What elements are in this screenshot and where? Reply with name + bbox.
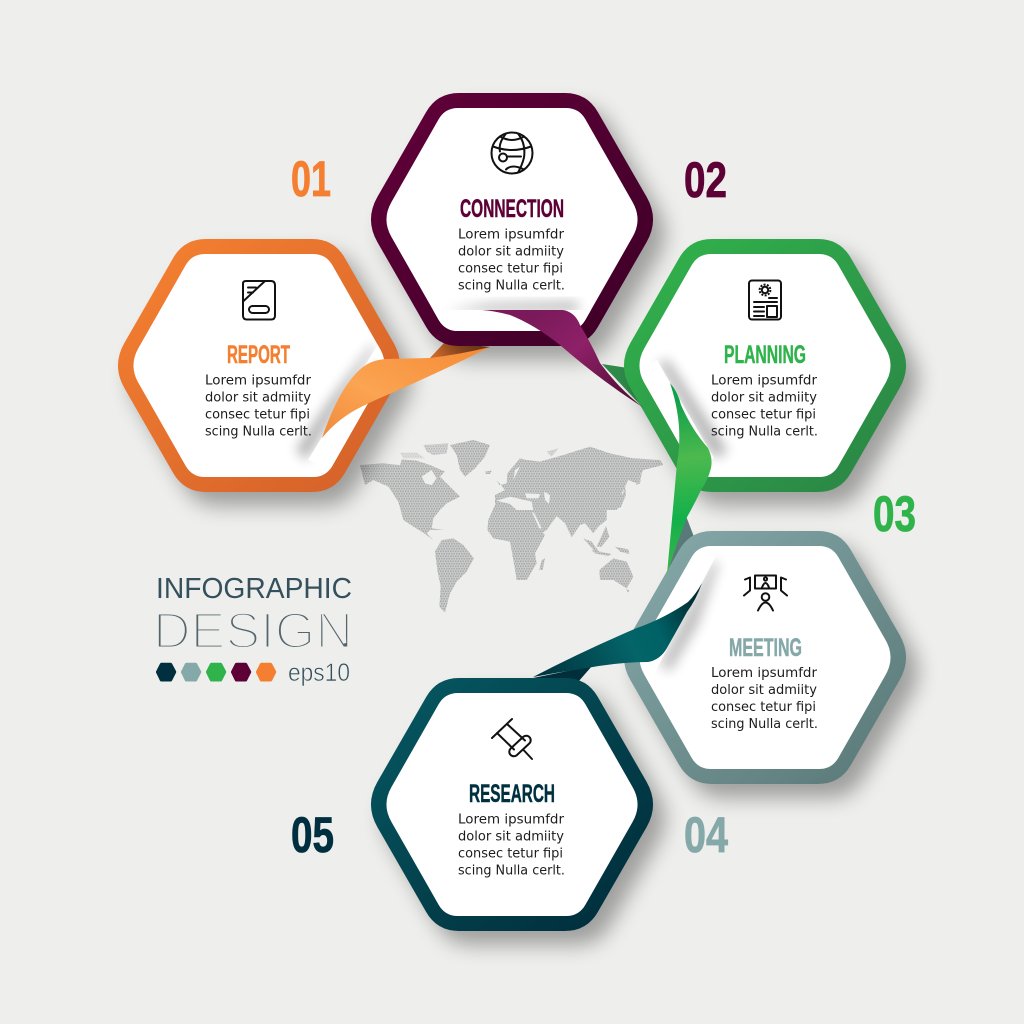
text block: research: dolor sit admiity [458, 830, 564, 844]
panel: planning hexagon [624, 239, 918, 506]
ribbon back: green [602, 364, 645, 410]
heading: meeting: MEETING [729, 634, 802, 662]
text block: planning [711, 374, 818, 440]
icon: meeting [744, 576, 787, 610]
text block: research: consec tetur fipi [458, 846, 563, 862]
text block: connection [458, 228, 565, 294]
icon: planning document [749, 280, 781, 320]
panel: connection hexagon [371, 93, 665, 360]
text block: connection: consec tetur fipi [458, 262, 563, 276]
number 05: 05 [291, 807, 334, 863]
number 04: 04 [684, 807, 728, 863]
ribbon: green [667, 383, 712, 574]
text block: connection: Lorem ipsumfdr [458, 228, 565, 242]
title line: design: DESIGN [153, 602, 353, 659]
number 03: 03 [873, 486, 916, 542]
text block: report: Lorem ipsumfdr [205, 374, 312, 388]
ribbon: orange [322, 347, 490, 438]
text block: report: consec tetur fipi [205, 408, 310, 422]
ribbon back: slate [666, 516, 696, 575]
text block: meeting: Lorem ipsumfdr [711, 666, 818, 681]
panel: research hexagon [371, 678, 665, 945]
text block: connection: dolor sit admiity [458, 244, 564, 260]
text block: connection: scing Nulla cerlt. [458, 278, 565, 294]
text block: report [205, 374, 312, 440]
text block: planning: dolor sit admiity [711, 390, 817, 406]
text block: research: scing Nulla cerlt. [458, 864, 565, 878]
text block: meeting: consec tetur fipi [711, 700, 816, 715]
text block: planning: consec tetur fipi [711, 408, 816, 422]
heading: research: RESEARCH [469, 780, 555, 808]
title: infographic design [153, 573, 353, 687]
text block: research [458, 812, 565, 878]
ribbon: purple [482, 310, 644, 408]
number 02: 02 [684, 152, 727, 208]
ribbon back: orange [428, 342, 490, 362]
heading: report: REPORT [227, 341, 290, 369]
heading: connection: CONNECTION [460, 195, 564, 223]
text block: planning: scing Nulla cerlt. [711, 424, 818, 440]
text block: meeting [711, 666, 818, 732]
title line: infographic: INFOGRAPHIC [156, 573, 352, 605]
text block: meeting: dolor sit admiity [711, 683, 817, 698]
text block: meeting: scing Nulla cerlt. [711, 717, 818, 732]
icon: report document [243, 281, 275, 320]
text block: report: scing Nulla cerlt. [205, 424, 312, 440]
icon: push pin [492, 719, 533, 759]
heading: planning: PLANNING [724, 341, 806, 369]
ribbon back: teal [533, 666, 592, 682]
colour swatches [158, 664, 274, 680]
number 01: 01 [291, 151, 331, 207]
label: eps10: eps10 [288, 659, 350, 687]
ribbon: teal [533, 583, 702, 677]
icon: globe [492, 132, 532, 174]
text block: planning: Lorem ipsumfdr [711, 374, 818, 388]
text block: research: Lorem ipsumfdr [458, 812, 565, 828]
text block: report: dolor sit admiity [205, 390, 311, 406]
panel: report hexagon [118, 239, 420, 506]
panel: meeting hexagon [624, 531, 918, 798]
world map [360, 440, 663, 613]
